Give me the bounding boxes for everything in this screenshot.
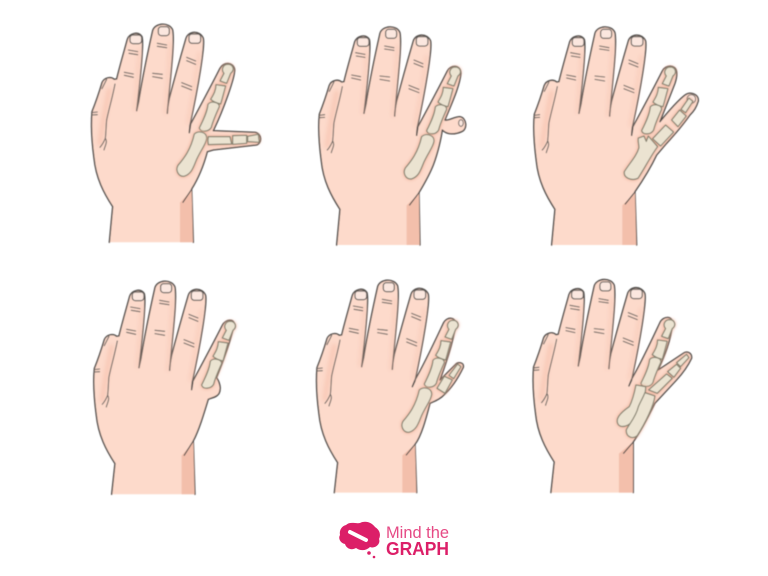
logo brain icon [339,522,380,558]
finger shading [542,46,642,146]
bones of middle digit [424,320,458,387]
metacarpal bone [404,135,434,179]
hand outline [316,280,463,493]
finger shading [542,299,641,399]
nails and creases [94,284,203,407]
hand outline [534,27,698,245]
logo text: GRAPH: GRAPH [386,539,449,559]
bones of short digit [437,364,461,393]
nails and creases [319,29,428,153]
wrist crease [623,442,633,454]
second digit nail [687,95,696,103]
nails and creases [317,283,426,406]
hand 6: two metacarpals, two digits [533,279,692,493]
hand outline [94,281,234,494]
bones of middle digit [202,321,235,388]
hand 2: small nub digit [319,27,466,245]
wrist shadow [622,193,636,245]
hand outline [319,27,466,245]
nails and creases [92,27,201,150]
finger shading [100,43,199,143]
wrist crease [409,193,419,205]
wrist shadow [619,442,633,493]
hand 5: short second digit [316,280,463,493]
finger shading [102,300,202,400]
hand 1: extra digit extended sideways [91,24,261,242]
wrist crease [625,192,635,204]
logo text: Mind the: Mind the [386,523,449,542]
wrist crease [184,441,193,456]
bones of middle digit [641,320,675,386]
hand 4: bump without extra bones [94,281,235,494]
hand 3: forked metacarpal, two digits [534,27,698,245]
bones of sideways digit [208,134,259,145]
paired metacarpals and second digit bones [617,354,689,437]
bones of middle digit [199,64,233,131]
wrist crease [183,189,192,203]
wrist crease [406,444,415,455]
hand outline [533,279,692,493]
forked metacarpal bone [624,98,693,179]
bones of middle digit [642,67,675,134]
wrist shadow [407,193,420,245]
metacarpal bone [177,132,207,176]
finger shading [327,46,427,146]
nub nail [459,120,463,126]
hand outline [91,24,261,242]
wrist shadow [180,190,193,242]
nails and creases [533,282,642,405]
wrist shadow [402,444,416,493]
metacarpal bone [402,388,432,432]
finger shading [325,299,424,399]
wrist shadow [182,442,195,494]
nails and creases [534,29,643,153]
logo: Mind the Graph [339,522,449,559]
bones of middle digit [427,67,460,134]
